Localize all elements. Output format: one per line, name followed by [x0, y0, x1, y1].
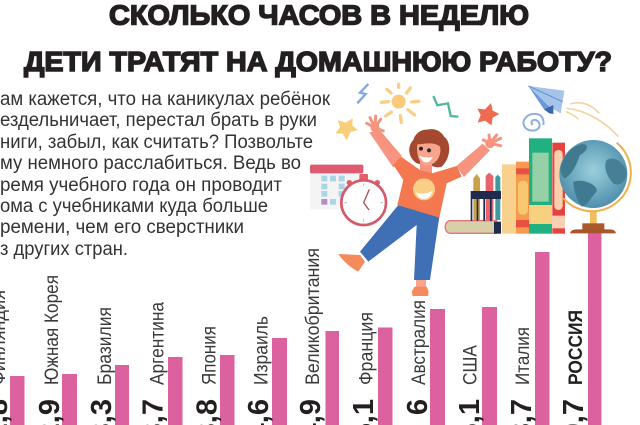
icon: alarm clock	[341, 174, 386, 225]
intro text block: ремя учебного года он проводит	[0, 175, 282, 196]
bars	[10, 232, 602, 425]
left arm	[369, 130, 402, 168]
right foot	[412, 287, 429, 296]
icon: flight trails	[566, 103, 618, 137]
country labels: Южная Корея	[42, 275, 63, 385]
pens in a cup	[471, 173, 501, 234]
title: СКОЛЬКО ЧАСОВ В НЕДЕЛЮ	[109, 0, 529, 30]
country labels: Австралия	[409, 300, 430, 385]
intro text block: ремени, чем его сверстники	[0, 217, 244, 238]
books	[502, 138, 565, 234]
icon: green zigzag	[433, 96, 458, 117]
right hand	[483, 135, 501, 147]
country labels: Франция	[356, 312, 378, 385]
icon: calendar	[310, 165, 363, 209]
country labels: Бразилия	[95, 307, 116, 385]
face	[417, 143, 440, 166]
intro text block: му немного расслабиться. Ведь во	[0, 153, 301, 174]
lying book	[445, 221, 497, 233]
country labels: Италия	[513, 327, 534, 385]
intro text block: ездельничает, перестал брать в руки	[0, 110, 317, 131]
country labels: РОССИЯ	[566, 310, 587, 385]
icon: paper plane	[528, 86, 564, 114]
right arm	[456, 144, 490, 177]
title: ДЕТИ ТРАТЯТ НА ДОМАШНЮЮ РАБОТУ?	[24, 46, 612, 77]
intro text block: ома с учебниками куда больше	[0, 196, 268, 217]
icon: blue zigzag	[357, 84, 368, 103]
values: 6	[402, 399, 434, 415]
values	[0, 399, 590, 425]
hair	[409, 129, 449, 167]
icon: red star	[477, 103, 499, 125]
intro text block: з других стран.	[0, 239, 128, 260]
country labels: Япония	[200, 326, 220, 385]
shirt logo smile	[416, 191, 433, 199]
icon: spiral	[523, 114, 543, 131]
title	[24, 0, 612, 77]
eyes	[419, 147, 423, 151]
icon: yellow star	[335, 118, 358, 140]
country labels: Израиль	[252, 316, 272, 385]
icon: globe	[559, 140, 631, 233]
left foot	[338, 254, 365, 272]
smile	[419, 156, 433, 162]
neck	[420, 162, 432, 174]
icon: sun	[381, 84, 419, 122]
intro text block: ам кажется, что на каникулах ребёнок	[0, 89, 331, 110]
illustration	[310, 84, 631, 296]
country labels: Аргентина	[148, 302, 168, 385]
country labels: США	[460, 345, 482, 385]
right leg skin	[416, 280, 426, 287]
intro text block: ниги, забыл, как считать? Позвольте	[0, 132, 313, 153]
country labels: Великобритания	[303, 248, 324, 385]
left hand	[367, 116, 383, 131]
bar chart	[0, 232, 602, 425]
country labels	[0, 248, 587, 385]
t-shirt	[393, 157, 462, 218]
intro text block	[0, 89, 331, 260]
person	[338, 116, 501, 296]
shirt logo	[413, 178, 435, 200]
pants	[360, 205, 439, 280]
